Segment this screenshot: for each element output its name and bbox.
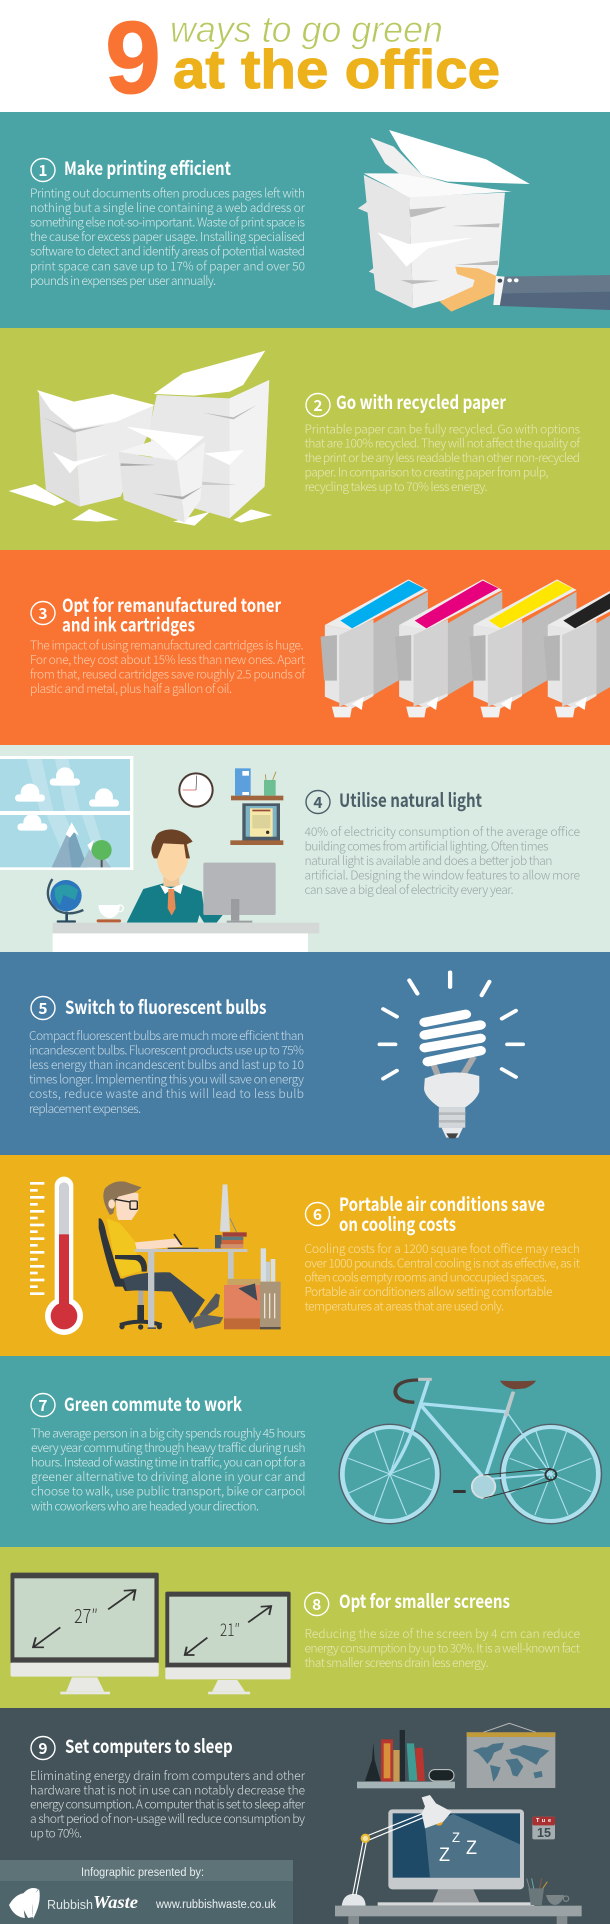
crank and chain [453,1468,556,1498]
panel: 3 remanufactured toner [0,550,610,745]
step 3 text: The impact of using remanufactured cartridges is huge. [30,635,303,653]
step 2 text: Printable paper can be fully recycled. Go with options [304,419,580,437]
step 6 text [304,1239,581,1314]
step 5 heading: Switch to fluorescent bulbs [65,994,266,1020]
panel: 7 green commute [0,1356,610,1547]
step 4 heading: 4 [313,791,323,813]
saddle [500,1381,536,1389]
bookshelf [357,1730,455,1788]
step 8 text: energy consumption by up to 30%. It is a well-known fact [304,1638,581,1656]
footer credit panel [0,1860,293,1924]
wheels [339,1424,601,1524]
step 2 heading [306,389,507,416]
icon: light bulb [380,972,523,1138]
step 1 text: the cause for excess paper usage. Installing specialised [30,227,305,245]
panel: 1 make printing efficient [0,112,610,328]
step 1 text: pounds in expenses per user annually. [30,271,216,289]
step 8 heading: Opt for smaller screens [339,1588,510,1614]
step 4 text: 40% of electricity consumption of the average office [304,822,580,840]
step 4 text: natural light is available and does a better job than [304,851,552,869]
step 7 text: hours. Instead of wasting time in traffic, you can opt for a [31,1453,306,1471]
logo: rubbish waste: Rubbish [47,1897,93,1912]
panel: 6 portable air conditioners [0,1155,610,1356]
step 9 text: Eliminating energy drain from computers and other [30,1766,306,1784]
step 2 text: recycling takes up to 70% less energy. [304,477,488,495]
step 7 heading: Green commute to work [64,1391,243,1417]
presented by label: Infographic presented by: [81,1867,204,1879]
icon: man at desk in office [0,756,319,952]
window [0,756,133,870]
step 5 text: less energy than incandescent bulbs and last up to 10 [29,1055,304,1073]
cartridge: yellow [469,579,577,717]
cartridge: cyan [321,579,428,717]
handlebar [395,1379,514,1417]
step 4 text: artificial. Designing the window features to allow more [304,865,580,883]
icon: desk with sleeping computer [335,1723,582,1924]
title: 9 [105,0,161,115]
sleeping Z letters: Z [439,1845,450,1866]
step 1 text: software to detect and identify areas of potential wasted [30,242,305,260]
icon: bicycle [339,1379,601,1524]
step 1 heading: 1 [38,159,48,181]
step 1 text: something else not-so-important. Waste of print space is [30,213,305,231]
desk top [335,1906,582,1924]
step 2 heading: 2 [313,394,323,416]
globe [48,879,83,923]
step 2 text: paper. In comparison to creating paper from pulp, [304,463,548,481]
world map [467,1723,555,1788]
step 3 heading: 3 [38,602,48,624]
step 7 text: choose to walk, use public transport, bike or carpool [31,1482,306,1500]
step 5 heading: 5 [38,997,48,1019]
icon: 27 inch monitor [11,1573,159,1694]
title [105,0,500,115]
step 1 text: Printing out documents often produces pages left with [30,184,305,202]
step 2 heading: Go with recycled paper [336,389,507,415]
step 3 heading: Opt for remanufactured toner [62,592,282,618]
step 4 text [304,822,580,898]
panel: 5 fluorescent bulbs [0,952,610,1155]
panel: 2 recycled paper [0,328,610,550]
man [127,829,223,923]
step 4 heading [306,787,482,814]
icon: thermometer and man at desk [30,1177,281,1335]
logo: rubbish waste: Waste [93,1892,138,1912]
thermometer [30,1177,83,1335]
step 9 text: a short period of non-usage will reduce consumption by [30,1809,305,1827]
step 1 text [30,184,306,289]
icon: desk with sleeping computer: 15 [537,1825,551,1840]
step 3 text: from that, reused cartridges save roughly 2.5 pounds of [30,664,305,682]
step 8 text: that smaller screens drain less energy. [304,1653,488,1671]
step 4 heading: Utilise natural light [339,787,482,813]
step 1 text: nothing but a single line containing a web address or [30,198,306,216]
step 2 text: that are 100% recycled. They will not affect the quality of [304,434,580,452]
step 2 text [304,419,580,495]
shelves [230,768,283,845]
title: at the office [173,38,500,100]
icon: stacks of paper [9,351,272,526]
logo: rubbish waste [9,1888,138,1919]
title: ways to go green [170,9,443,50]
step 7 heading: 7 [38,1394,48,1416]
icon: paper stack held by hand [358,130,610,312]
step 9 text [30,1766,306,1842]
step 3 text: For one, they cost about 15% less than new ones. Apart [30,650,306,668]
clock [178,772,214,808]
step 8 text: Reducing the size of the screen by 4 cm can reduce [304,1624,580,1642]
frame [390,1382,551,1480]
desk [53,923,319,952]
step 8 heading [305,1588,510,1616]
step 8 heading: 8 [312,1593,321,1615]
step 9 heading: 9 [38,1737,48,1759]
step 4 text: can save a big deal of electricity every year. [304,880,514,898]
website url: www.rubbishwaste.co.uk [155,1899,276,1911]
step 4 text: building comes from artificial lighting. Often times [304,836,549,854]
coffee cup [97,905,123,922]
step 6 heading: Portable air conditions save [339,1191,545,1217]
step 1 heading: Make printing efficient [64,155,231,181]
icon: 21 inch monitor [165,1592,291,1694]
step 9 text: energy consumption. A computer that is set to sleep after [30,1795,306,1813]
step 7 text: with coworkers who are headed your direction. [31,1496,259,1514]
step 1 heading [31,155,231,182]
icon: ink cartridges [321,579,610,717]
step 3 text: plastic and metal, plus half a gallon of oil. [30,679,232,697]
man and chair [99,1181,223,1330]
step 5 text: times longer. Implementing this you will save on energy [29,1070,304,1088]
computer monitor [203,863,276,923]
panel: 4 natural light [0,745,610,952]
step 7 text [31,1423,306,1514]
step 6 heading: on cooling costs [339,1211,456,1237]
step 7 text: greener alternative to driving alone in your car and [31,1467,306,1485]
sleeping Z letters: Z [466,1838,477,1859]
icon: 21 inch monitor: 21″ [220,1616,240,1641]
step 9 heading [31,1733,233,1760]
computer [378,1809,534,1906]
step 6 text: over 1000 pounds. Central cooling is not as effective, as it [304,1253,581,1271]
step 7 text: The average person in a big city spends roughly 45 hours [31,1423,306,1441]
step 6 text: temperatures at areas that are used only. [304,1296,504,1314]
step 2 text: the print or be any less readable than other non-recycled [304,448,580,466]
step 5 text: incandescent bulbs. Fluorescent products use up to 75% [29,1040,304,1058]
panel: 9 computers to sleep [0,1708,610,1924]
step 5 text [29,1026,304,1117]
step 8 text [304,1624,581,1671]
step 9 text: hardware that is not in use can notably decrease the [30,1780,305,1798]
step 3 heading [31,592,282,638]
step 5 text: costs, reduce waste and this will lead to less bulb [29,1084,304,1102]
cartridge: black [543,579,610,717]
panel: 8 smaller screens [0,1547,610,1708]
cartridge: magenta [395,579,502,717]
lamp [342,1795,452,1906]
sleeping Z letters: Z [452,1829,460,1845]
step 3 heading: and ink cartridges [62,612,195,638]
step 1 text: print space can save up to 17% of paper and over 50 [30,256,305,274]
step 6 heading [306,1191,545,1237]
step 6 text: often cools empty rooms and unoccupied spaces. [304,1268,547,1286]
step 6 text: Portable air conditioners allow setting comfortable [304,1282,553,1300]
step 5 text: Compact fluorescent bulbs are much more efficient than [29,1026,304,1044]
pen cup and mug [527,1878,569,1905]
calendar [532,1817,555,1839]
boxes and rolls [224,1248,281,1329]
step 6 text: Cooling costs for a 1200 square foot office may reach [304,1239,580,1257]
step 9 text: up to 70%. [30,1824,82,1842]
step 7 text: every year commuting through heavy traffic during rush [31,1438,306,1456]
desk and monitor [135,1184,247,1329]
step 9 heading: Set computers to sleep [65,1733,233,1759]
icon: 27 inch monitor: 27″ [74,1602,98,1629]
step 6 heading: 6 [313,1203,322,1225]
step 3 text [30,635,306,697]
icon: desk with sleeping computer: Tue [536,1818,551,1824]
sleeping Z letters [439,1829,477,1866]
step 5 text: replacement expenses. [29,1099,141,1117]
